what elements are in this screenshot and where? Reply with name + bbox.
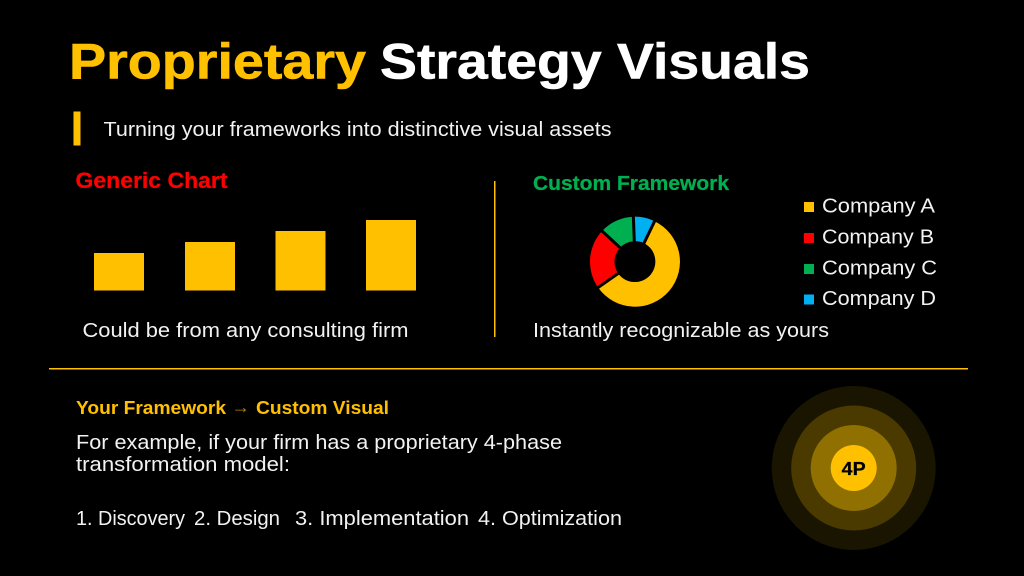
vertical divider [494,181,496,337]
caption: custom framework: Instantly recognizable as yours [533,319,829,342]
heading: generic chart: Generic Chart [76,168,228,193]
text block: framework example: 4. Optimization [478,507,622,530]
legend: Company B [822,226,934,248]
legend [804,194,937,310]
text block: framework example: transformation model: [76,453,290,476]
legend: Company A [822,194,935,218]
text block: framework example: 2. Design [194,507,280,530]
accent bar [74,112,80,146]
legend: Company D [822,287,936,310]
bar chart [94,220,416,290]
icon: concentric circles 4P [772,386,936,550]
legend: Company C [822,256,937,280]
description: For example, if your firm has a proprietary 4-phase [76,431,562,454]
icon: concentric circles 4P: 4P [842,458,866,479]
subheading [76,397,389,418]
phase list: 1. Discovery [76,507,186,530]
donut chart [590,215,680,307]
subtitle: Turning your frameworks into distinctive visual assets [104,118,612,141]
title: Proprietary [69,33,366,89]
title [69,33,810,89]
text block: framework example: 3. Implementation [295,507,469,530]
heading: custom framework: Custom Framework [533,173,730,195]
subheading: Custom Visual [256,398,389,418]
title: Strategy Visuals [380,33,810,89]
panel: custom framework [533,173,937,342]
subheading: → [232,397,250,417]
text block: framework example [76,397,622,530]
caption: generic chart: Could be from any consulting firm [82,319,408,342]
horizontal divider [49,368,968,370]
subheading: Your Framework [76,398,227,418]
panel: generic chart [76,168,416,342]
